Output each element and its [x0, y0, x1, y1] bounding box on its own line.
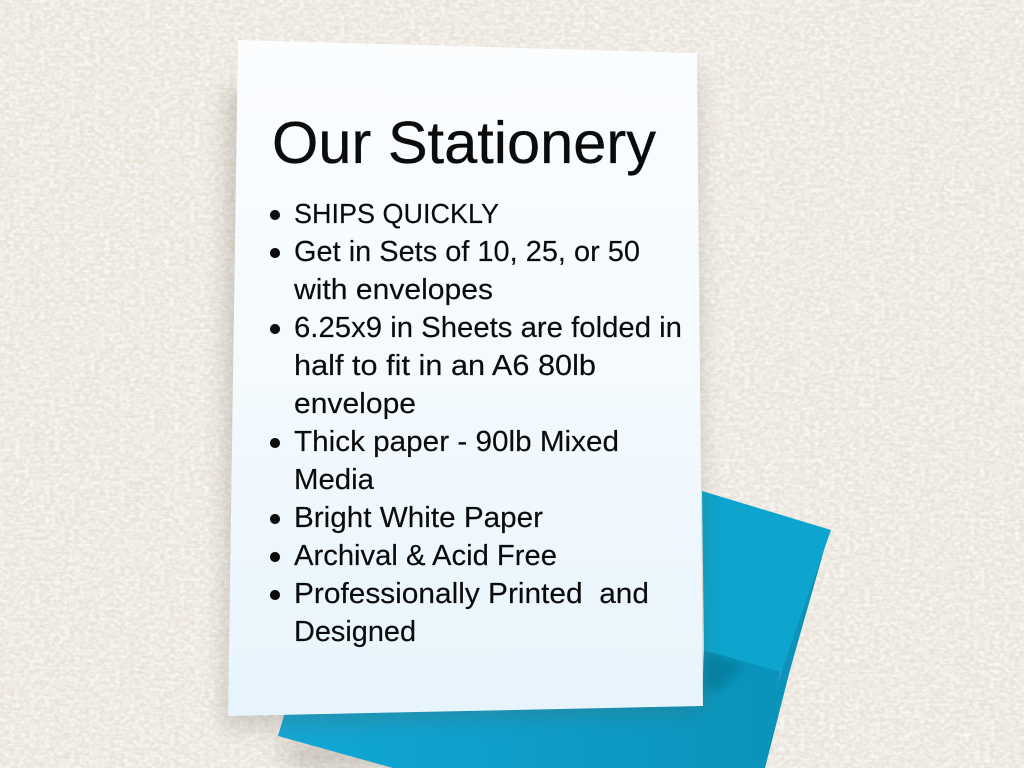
title: Our Stationery: [272, 110, 657, 176]
bullet: thick paper: Media: [294, 464, 375, 496]
bullet: sheet size: 6.25x9 in Sheets are folded in: [294, 312, 682, 344]
bullet: sheet size: half to fit in an A6 80lb: [294, 350, 596, 382]
bullet: professionally printed: Designed: [294, 616, 416, 648]
envelope side sheet: [754, 536, 828, 768]
envelope body: [278, 650, 781, 768]
flap shadow: [704, 652, 745, 692]
bullet: sets: with envelopes: [293, 274, 493, 306]
bullet: sheet size: [270, 312, 682, 420]
bullet: professionally printed: Professionally Printed and: [294, 578, 649, 610]
bullet: thick paper: [270, 426, 619, 496]
bullet: thick paper: Thick paper - 90lb Mixed: [294, 426, 619, 458]
paper shadow: [224, 70, 704, 728]
bullet: bright white: Bright White Paper: [294, 502, 543, 534]
paper card: [228, 40, 703, 716]
bullet: sets: Get in Sets of 10, 25, or 50: [294, 236, 640, 268]
bullet list: [270, 198, 682, 648]
envelope shadow: [270, 710, 760, 768]
bullet: sheet size: envelope: [294, 388, 416, 420]
envelope flap: [702, 491, 831, 672]
bullet: ships quickly: SHIPS QUICKLY: [294, 198, 499, 229]
bullet: sets: [270, 236, 640, 306]
bullet: professionally printed: [270, 578, 649, 648]
bullet: archival: Archival & Acid Free: [294, 540, 557, 572]
envelope: [270, 491, 831, 768]
